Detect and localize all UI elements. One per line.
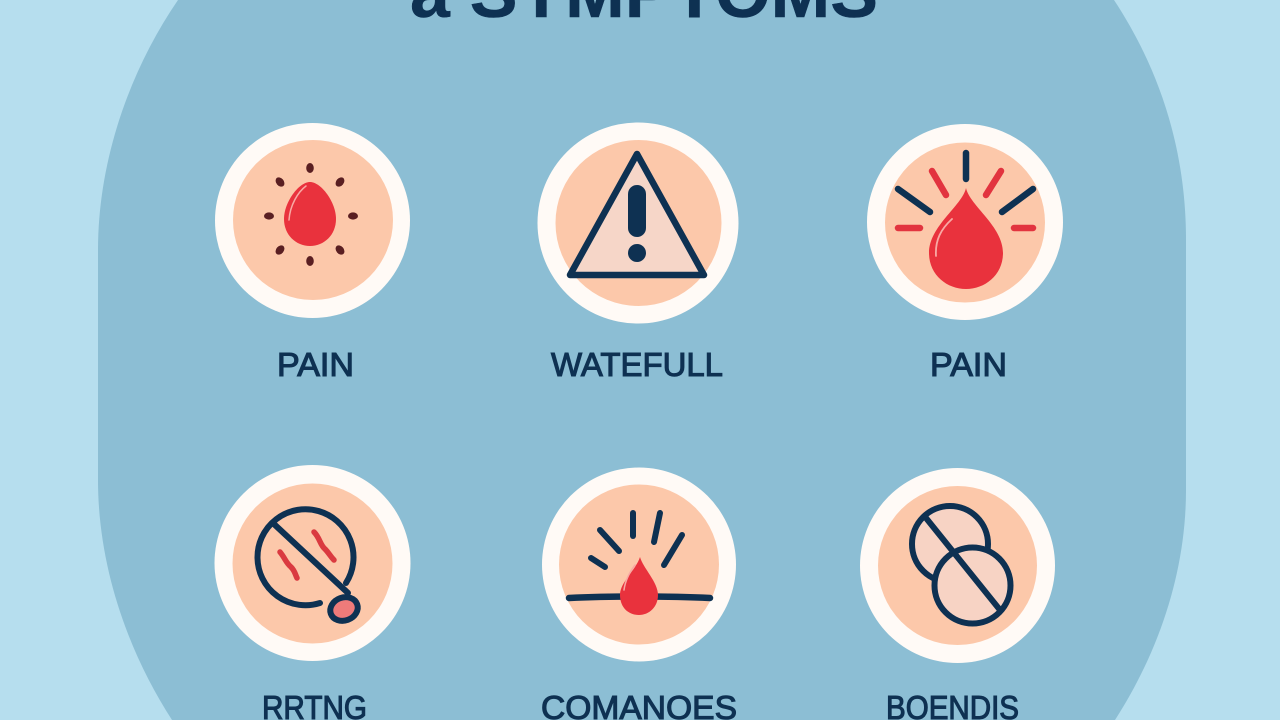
icon: pain droplet with dots — [215, 123, 410, 318]
icon: crossed-out circle — [214, 465, 410, 661]
icon: overlapping crossed circles — [860, 468, 1055, 663]
label: pain: PAIN — [930, 346, 1007, 383]
label: watefull: WATEFULL — [551, 346, 723, 383]
icon: large droplet with rays — [867, 124, 1063, 320]
icon: warning triangle — [538, 122, 738, 324]
label: pain: PAIN — [277, 346, 354, 383]
icon: droplet on skin line — [542, 468, 736, 662]
